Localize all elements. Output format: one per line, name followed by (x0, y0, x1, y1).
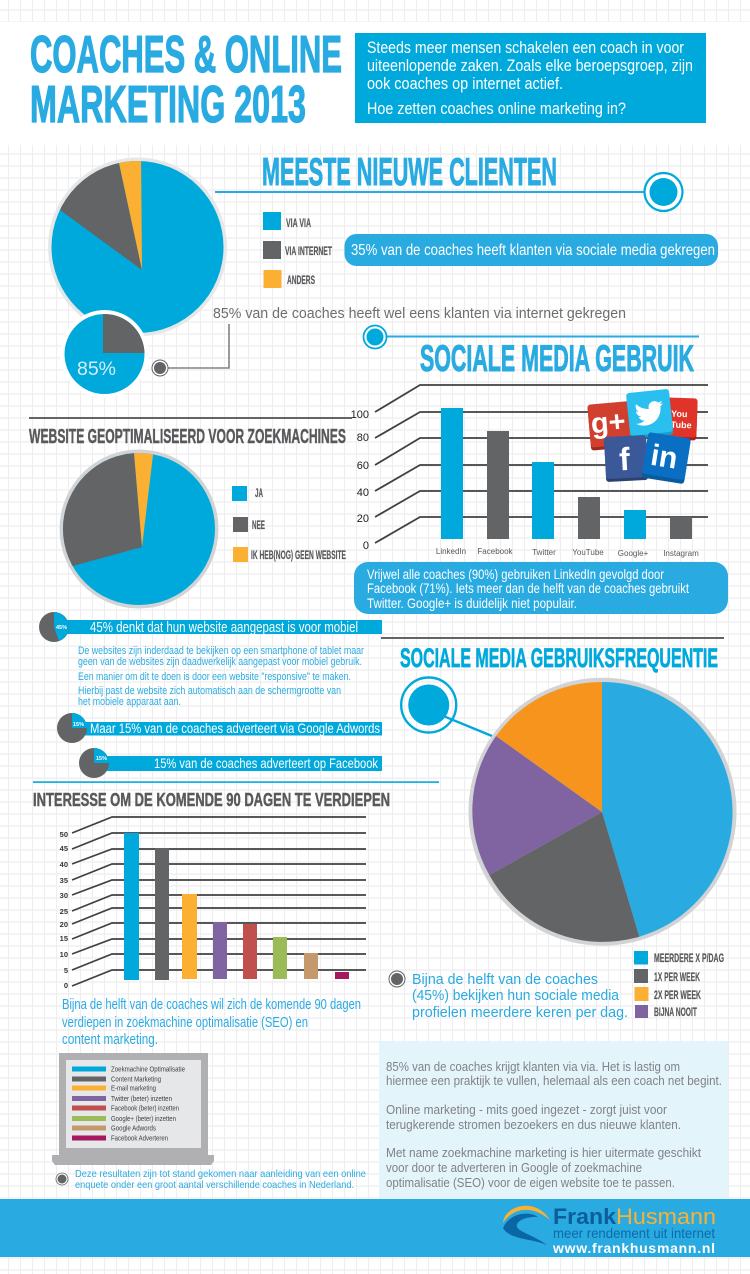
legend: website geoptimaliseerd (232, 486, 346, 562)
bar chart: sociale media gebruik: 60 (357, 460, 369, 472)
note: onderzoeksverantwoording: enquete onder een groot aantal verschillende coaches in Nederland. (75, 1179, 354, 1191)
intro panel: Hoe zetten coaches online marketing in? (367, 99, 626, 118)
legend: meeste nieuwe clienten: VIA VIA (286, 216, 311, 230)
laptop legend: Facebook (beter) inzetten (111, 1106, 179, 1112)
bar chart: interesse: 10 (60, 950, 68, 959)
text: 85% via internet: 85% van de coaches heeft wel eens klanten via internet gekregen (213, 305, 626, 322)
stat bar: 15% facebook: 15% van de coaches adverteert op Facebook (154, 755, 379, 771)
text block: responsive uitleg: Hierbij past de website zich automatisch aan de schermgrootte van (78, 685, 341, 697)
intro panel: Steeds meer mensen schakelen een coach in voor (367, 38, 684, 57)
stat bar: 15% facebook: 15% (96, 756, 107, 762)
title (30, 26, 342, 134)
intro panel: ook coaches op internet actief. (367, 74, 563, 93)
laptop legend: Twitter (beter) inzetten (111, 1096, 172, 1103)
legend: website geoptimaliseerd: NEE (252, 518, 265, 532)
panel: conclusie: Met name zoekmachine marketing is hier uitermate geschikt (386, 1145, 701, 1160)
bar chart: interesse: 50 (60, 830, 68, 839)
bar chart: sociale media gebruik: Instagram (663, 549, 699, 558)
panel: conclusie: voor door te adverteren in Google of zoekmachine (386, 1160, 642, 1175)
icon: social media tiles (587, 389, 698, 484)
text block: responsive uitleg: het mobiele apparaat aan. (78, 696, 181, 708)
callout: frequentie conclusie: profielen meerdere keren per dag. (412, 1004, 628, 1021)
text block: interesse conclusie: Bijna de helft van de coaches wil zich de komende 90 dagen (62, 996, 361, 1013)
bar chart: sociale media gebruik: 0 (363, 540, 369, 552)
callout: linkedin samenvatting: Vrijwel alle coaches (90%) gebruiken LinkedIn gevolgd door (367, 566, 664, 582)
legend: gebruiksfrequentie (634, 951, 724, 1019)
laptop legend: E-mail marketing (111, 1086, 156, 1092)
text block: responsive uitleg: Een manier om dit te doen is door een website "responsive" te maken. (78, 671, 351, 683)
laptop legend: Google Adwords (111, 1126, 156, 1132)
text block: interesse conclusie (62, 996, 361, 1048)
panel: conclusie: Online marketing - mits goed ingezet - zorgt juist voor (386, 1102, 668, 1117)
text block: responsive uitleg (78, 645, 364, 708)
bar chart: sociale media gebruik: Twitter (532, 548, 556, 557)
stat bar: 15% google adwords: Maar 15% van de coaches adverteert via Google Adwords (90, 720, 380, 736)
logo: Frank Husmann: www.frankhusmann.nl (552, 1240, 715, 1256)
callout: linkedin samenvatting (354, 562, 728, 614)
stat bar: 45% mobiel (39, 612, 382, 642)
stat bar: 15% google adwords (57, 713, 382, 743)
small pie: 85%: 85% (77, 359, 116, 380)
legend: gebruiksfrequentie: BIJNA NOOIT (654, 1005, 697, 1019)
logo: Frank Husmann: meer rendement uit internet (553, 1225, 715, 1241)
stat bar: 45% mobiel: 45% (56, 625, 67, 631)
laptop legend: Zoekmachine Optimalisatie (111, 1066, 185, 1074)
text block: interesse conclusie: verdiepen in zoekmachine optimalisatie (SEO) en (62, 1014, 308, 1031)
intro panel (355, 33, 706, 123)
bar chart: interesse: 35 (60, 876, 68, 885)
title: MARKETING 2013 (30, 76, 306, 134)
callout: frequentie conclusie (389, 971, 628, 1021)
logo: Frank Husmann: Husmann (616, 1204, 716, 1229)
bar chart: sociale media gebruik: 80 (357, 432, 369, 444)
divider and heading: interesse: INTERESSE OM DE KOMENDE 90 DAGEN TE VERDIEPEN (33, 790, 390, 810)
laptop legend: Google+ (beter) inzetten (111, 1116, 176, 1123)
footer band (0, 1199, 750, 1257)
legend: gebruiksfrequentie: 2X PER WEEK (654, 988, 701, 1002)
legend: meeste nieuwe clienten (263, 212, 332, 288)
logo: Frank Husmann (503, 1204, 716, 1256)
connector: sociale media gebruik (364, 326, 699, 348)
callout: frequentie conclusie: Bijna de helft van de coaches (412, 971, 598, 988)
intro panel: uiteenlopende zaken. Zoals elke beroepsgroep, zijn (367, 56, 693, 75)
text block: responsive uitleg: geen van de websites zijn daadwerkelijk aangepast voor mobiel gebruik. (78, 656, 362, 668)
pie chart: website geoptimaliseerd (60, 450, 218, 608)
connector: 85% callout (152, 324, 229, 376)
bar chart: interesse: 0 (64, 981, 68, 990)
icon: social media tiles: Tube (671, 420, 692, 430)
bar chart: interesse: 15 (60, 934, 68, 943)
callout: 35% sociale media (344, 234, 718, 266)
callout: linkedin samenvatting: Twitter. Google+ is duidelijk niet populair. (367, 595, 577, 611)
bar chart: interesse: 45 (60, 844, 68, 853)
bar chart: interesse: 20 (60, 920, 68, 929)
legend: meeste nieuwe clienten: ANDERS (287, 273, 315, 287)
heading: website geoptimaliseerd: WEBSITE GEOPTIMALISEERD VOOR ZOEKMACHINES (29, 426, 346, 448)
icon: magnifier marker (401, 678, 492, 736)
pie chart: gebruiksfrequentie (468, 678, 736, 946)
panel: conclusie: optimalisatie (SEO) voor de eigen website toe te passen. (386, 1175, 675, 1190)
icon: social media tiles: g+ (590, 406, 627, 441)
bar chart: sociale media gebruik (351, 385, 708, 558)
bar chart: sociale media gebruik: 100 (351, 409, 369, 421)
stat bar: 15% google adwords: 15% (73, 722, 84, 728)
bar chart: interesse: 40 (60, 860, 68, 869)
legend: meeste nieuwe clienten: VIA INTERNET (285, 244, 332, 258)
stat bar: 15% facebook (79, 748, 382, 778)
bar chart: interesse: 30 (60, 891, 68, 900)
laptop legend: Facebook Adverteren (111, 1136, 168, 1142)
text block: interesse conclusie: content marketing. (62, 1031, 158, 1048)
panel: conclusie: 85% van de coaches krijgt klanten via via. Het is lastig om (386, 1059, 680, 1074)
connector with ring marker (215, 173, 682, 211)
legend: website geoptimaliseerd: JA (255, 486, 263, 500)
bar chart: sociale media gebruik: YouTube (572, 548, 604, 557)
bar chart: sociale media gebruik: Facebook (477, 547, 514, 556)
icon: social media tiles: You (671, 409, 688, 419)
icon: social media tiles: f (618, 441, 631, 477)
laptop legend: Content Marketing (111, 1076, 161, 1084)
panel: conclusie (379, 1041, 728, 1199)
bar chart: sociale media gebruik: 20 (357, 513, 369, 525)
laptop legend (52, 1053, 214, 1165)
stat bar: 45% mobiel: 45% denkt dat hun website aangepast is voor mobiel (90, 620, 358, 636)
bar chart: sociale media gebruik: 40 (357, 487, 369, 499)
small pie: 85% (60, 310, 148, 398)
legend: gebruiksfrequentie: 1X PER WEEK (654, 970, 700, 984)
panel: conclusie: terugkerende stromen bezoekers en dus nieuwe klanten. (386, 1117, 681, 1132)
icon: social media tiles: in (648, 439, 680, 476)
legend: website geoptimaliseerd: IK HEB(NOG) GEEN WEBSITE (251, 548, 346, 562)
text block: responsive uitleg: De websites zijn inderdaad te bekijken op een smartphone of tablet maar (78, 645, 364, 657)
title: COACHES & ONLINE (30, 26, 342, 84)
callout: frequentie conclusie: (45%) bekijken hun sociale media (412, 987, 620, 1004)
bar chart: interesse: 25 (60, 907, 68, 916)
note: onderzoeksverantwoording: Deze resultaten zijn tot stand gekomen naar aanleiding van een online (75, 1168, 366, 1180)
note: onderzoeksverantwoording (56, 1168, 366, 1191)
pie chart: meeste nieuwe clienten (48, 158, 227, 336)
bar chart: interesse: 5 (64, 966, 68, 975)
logo: Frank Husmann: Frank (553, 1204, 617, 1229)
bar chart: sociale media gebruik: Google+ (618, 549, 649, 558)
bar chart: sociale media gebruik: LinkedIn (436, 547, 466, 556)
bar chart: interesse (60, 817, 366, 990)
